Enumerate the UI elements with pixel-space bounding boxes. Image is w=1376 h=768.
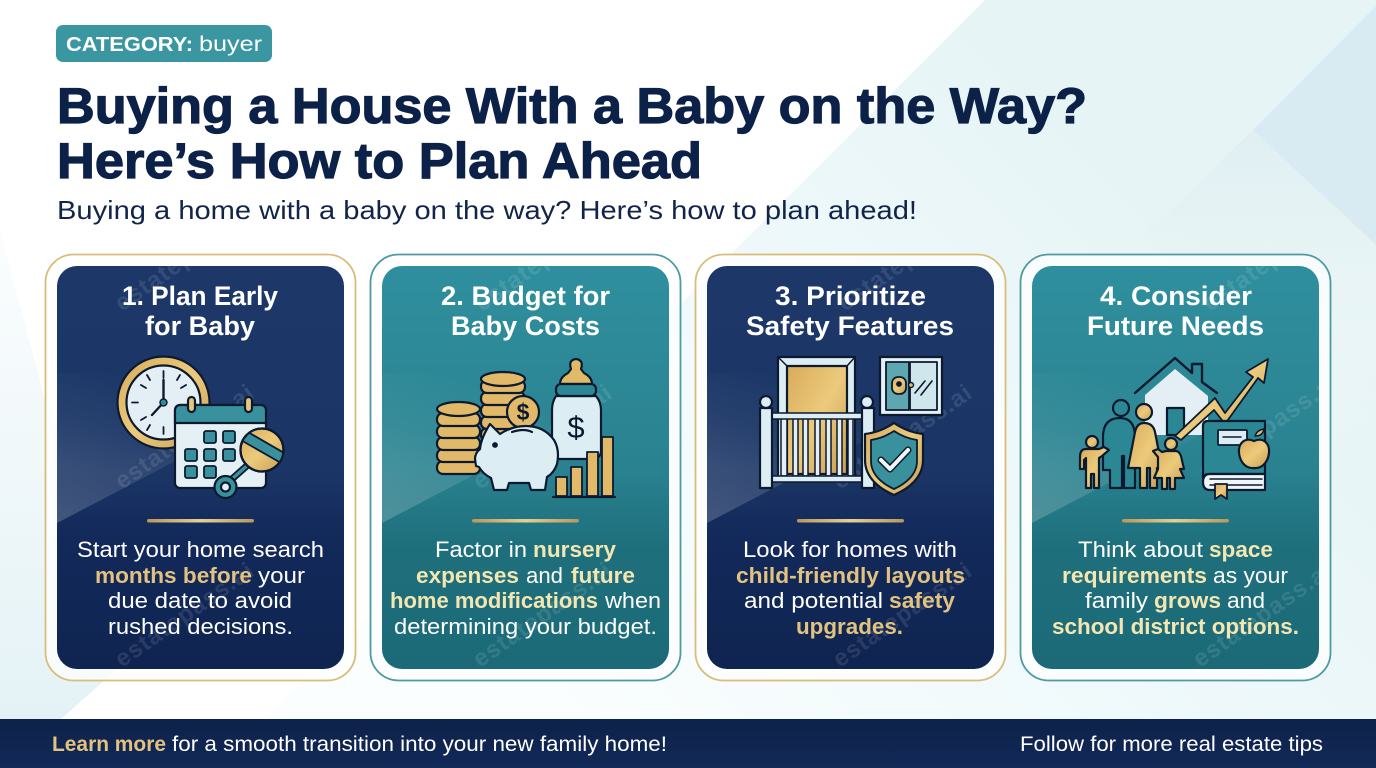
heading: step 1 bbox=[122, 281, 278, 341]
text: step 2 bbox=[390, 537, 661, 639]
panel: step 3 safety: estatepass.ai bbox=[828, 557, 978, 673]
panel: step 3 safety bbox=[694, 254, 1006, 682]
heading: step 1: 1. Plan Early bbox=[122, 281, 278, 311]
divider bbox=[1122, 519, 1229, 522]
panel: step 2 budget bbox=[370, 254, 682, 682]
panel: step 2 budget: estatepass.ai bbox=[470, 201, 620, 317]
text: step 4: space bbox=[1209, 537, 1273, 562]
text: step 3 bbox=[736, 537, 965, 639]
category badge bbox=[56, 25, 272, 62]
title: Here’s How to Plan Ahead bbox=[57, 133, 702, 189]
icon: family, house, growth arrow and book bbox=[1080, 358, 1269, 499]
panel: step 1 plan early bbox=[44, 254, 356, 682]
title bbox=[57, 78, 1087, 189]
footer call to action: Learn more bbox=[52, 732, 166, 756]
panel: step 4 future needs: estatepass.ai bbox=[1188, 557, 1338, 673]
icon glyphs: dollar signs: $ bbox=[567, 410, 585, 445]
panel: step 3 safety: estatepass.ai bbox=[828, 379, 978, 495]
footer call to action: for a smooth transition into your new family home! bbox=[172, 732, 667, 756]
text: step 2: and bbox=[526, 563, 563, 588]
text: step 1: rushed decisions. bbox=[108, 614, 293, 639]
panel: step 1 plan early: estatepass.ai bbox=[110, 201, 260, 317]
text: step 3: Look for homes with bbox=[743, 537, 957, 562]
heading: step 3: Safety Features bbox=[746, 311, 954, 341]
panel: step 2 budget: estatepass.ai bbox=[468, 557, 618, 673]
divider bbox=[797, 519, 904, 522]
footer follow note: Follow for more real estate tips bbox=[1020, 732, 1323, 756]
text: step 4: and bbox=[1227, 588, 1265, 613]
panel: step 3 safety: estatepass.ai bbox=[833, 201, 983, 317]
text: step 2: nursery bbox=[533, 537, 616, 562]
text: step 1: months before bbox=[95, 563, 252, 588]
icon glyphs: dollar signs bbox=[517, 399, 585, 445]
category badge: buyer bbox=[199, 33, 262, 56]
heading: step 3: 3. Prioritize bbox=[775, 281, 926, 311]
panel: step 1 plan early: estatepass.ai bbox=[110, 379, 260, 495]
text: step 1: due date to avoid bbox=[108, 588, 292, 613]
text: step 4: family bbox=[1085, 588, 1149, 613]
title: Buying a House With a Baby on the Way? bbox=[57, 78, 1087, 134]
panel: step 1 plan early: estatepass.ai bbox=[110, 557, 260, 673]
heading: step 2 bbox=[441, 281, 610, 341]
text: step 3: upgrades. bbox=[796, 614, 903, 639]
heading: step 4: 4. Consider bbox=[1100, 281, 1252, 311]
icon: crib, window lock and shield bbox=[760, 357, 942, 495]
panel: step 4 future needs: estatepass.ai bbox=[1193, 369, 1343, 485]
category badge: CATEGORY: bbox=[66, 34, 193, 56]
heading: step 4 bbox=[1087, 281, 1264, 341]
text: step 2: determining your budget. bbox=[394, 614, 657, 639]
panel: step 4 future needs bbox=[1020, 254, 1332, 682]
text: step 4 bbox=[1052, 537, 1299, 639]
text: step 4: school district options. bbox=[1052, 614, 1299, 639]
heading: step 4: Future Needs bbox=[1087, 311, 1264, 341]
subtitle: Buying a home with a baby on the way? Here’s how to plan ahead! bbox=[57, 195, 917, 225]
heading: step 2: Baby Costs bbox=[451, 311, 600, 341]
text: step 2: future bbox=[571, 563, 635, 588]
text: step 2: home modifications bbox=[390, 588, 598, 613]
text: step 3: child-friendly layouts bbox=[736, 563, 965, 588]
text: step 4: grows bbox=[1154, 588, 1221, 613]
divider bbox=[147, 519, 254, 522]
panel: step 4 future needs: estatepass.ai bbox=[1198, 201, 1348, 317]
text: step 1: your bbox=[258, 563, 306, 588]
text: step 4: Think about bbox=[1078, 537, 1204, 562]
heading: step 2: 2. Budget for bbox=[441, 281, 610, 311]
heading: step 3 bbox=[746, 281, 954, 341]
text: step 1 bbox=[77, 537, 324, 639]
text: step 1: Start your home search bbox=[77, 537, 324, 562]
text: step 2: expenses bbox=[416, 563, 519, 588]
icon: coins, piggy bank, bottle and bars bbox=[437, 359, 615, 497]
text: step 3: safety bbox=[889, 588, 955, 613]
text: step 3: and potential bbox=[744, 588, 883, 613]
text: step 2: when bbox=[604, 588, 661, 613]
icon glyphs: dollar signs: $ bbox=[517, 399, 530, 425]
icon: clock, calendar and rattle bbox=[118, 356, 286, 498]
heading: step 1: for Baby bbox=[145, 311, 255, 341]
panel: step 2 budget: estatepass.ai bbox=[468, 379, 618, 495]
divider bbox=[472, 519, 579, 522]
text: step 4: requirements bbox=[1062, 563, 1207, 588]
text: step 2: Factor in bbox=[435, 537, 527, 562]
footer bar bbox=[0, 719, 1376, 768]
text: step 4: as your bbox=[1213, 563, 1289, 588]
